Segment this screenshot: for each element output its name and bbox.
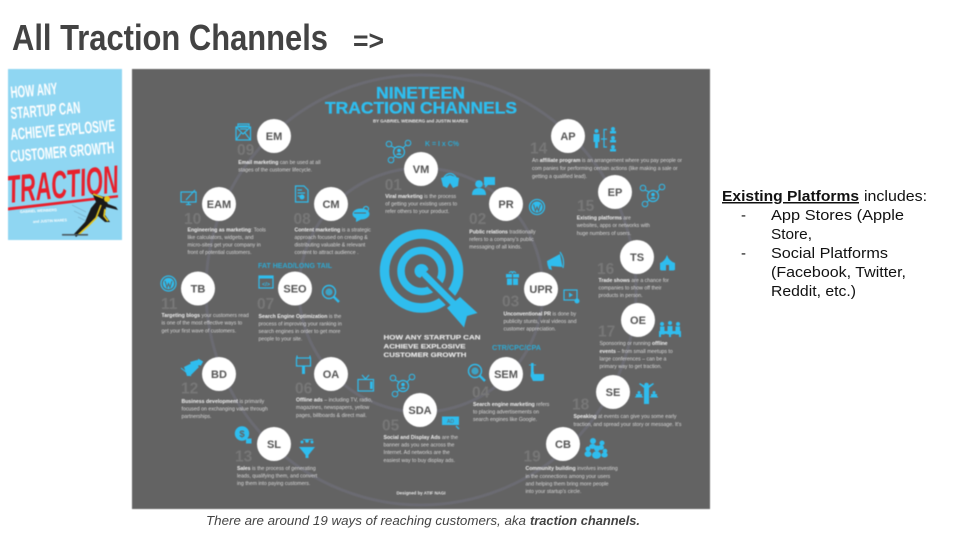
channel 04 SEM: 04 bbox=[472, 384, 490, 402]
channel 08 CM: content to attract audience . bbox=[294, 250, 359, 256]
text block: existing platforms: - bbox=[741, 245, 746, 262]
channel 03 UPR: 03 bbox=[502, 294, 520, 310]
channel 18 SE: Speaking at events can give you some early bbox=[574, 414, 677, 420]
text block: existing platforms: includes: bbox=[864, 188, 927, 205]
channel 06 OA: 06 bbox=[295, 380, 313, 398]
channel 17 OE: large conferences – can be a bbox=[600, 356, 667, 362]
icon: speaker bbox=[472, 177, 495, 195]
icon: search bbox=[322, 286, 339, 302]
book cover: Traction bbox=[7, 68, 123, 241]
channel 09 EM: stages of the customer lifecycle. bbox=[238, 168, 312, 174]
channel 03 UPR: UPR bbox=[529, 284, 553, 296]
channel 08 CM: distributing valuable & relevant bbox=[294, 242, 366, 248]
channel 19 CB: in the connections among your users bbox=[526, 474, 611, 480]
channel 03 UPR: publicity stunts, viral videos and bbox=[504, 319, 577, 325]
channel 16 TS bbox=[597, 240, 675, 299]
channel 19 CB: and helping them bring more people bbox=[526, 482, 609, 488]
icon: handshake bbox=[441, 174, 459, 188]
channel 12 BD: focused on exchanging value through bbox=[182, 406, 268, 412]
tag: fat head long tail: FAT HEAD/LONG TAIL bbox=[258, 263, 333, 270]
channel 06 OA: pages, billboards & direct mail. bbox=[296, 413, 367, 419]
channel 09 EM: Email marketing can be used at all bbox=[238, 160, 320, 166]
text block: existing platforms: Reddit, etc.) bbox=[771, 283, 856, 300]
text block: existing platforms: Store, bbox=[771, 226, 812, 243]
channel 01 VM: 01 bbox=[385, 177, 402, 194]
channel 18 SE: 18 bbox=[572, 396, 590, 414]
channel 03 UPR: Unconventional PR is done by bbox=[504, 312, 577, 318]
icon: megaphone bbox=[547, 252, 564, 270]
channel 05 SDA: easiest way to buy display ads. bbox=[384, 458, 455, 464]
channel 07 SEO: search engines in order to get more bbox=[258, 329, 341, 335]
channel 11 TB: TB bbox=[191, 284, 205, 296]
caption: There are around 19 ways of reaching customers, aka bbox=[206, 513, 526, 528]
icon: affiliate tree bbox=[594, 127, 616, 152]
center caption: CUSTOMER GROWTH bbox=[384, 352, 467, 359]
channel 11 TB: is one of the most effective ways to bbox=[162, 321, 242, 327]
icon: wordpress bbox=[530, 200, 544, 214]
channel 17 OE: OE bbox=[630, 315, 646, 327]
channel 04 SEM: search engines like Google. bbox=[473, 417, 537, 423]
channel 19 CB: 19 bbox=[524, 448, 541, 466]
channel 14 AP: AP bbox=[560, 131, 576, 143]
channel 03 UPR bbox=[502, 252, 580, 332]
channel 08 CM: approach focused on creating & bbox=[294, 235, 368, 241]
channel 18 SE bbox=[572, 375, 682, 428]
channel 13 SL: Sales is the process of generating bbox=[237, 466, 316, 472]
infographic title bbox=[325, 84, 517, 124]
channel 16 TS: Trade shows are a chance for bbox=[598, 278, 669, 284]
center caption: ACHIEVE EXPLOSIVE bbox=[384, 343, 466, 350]
channel 09 EM: EM bbox=[266, 131, 282, 143]
channel 02 PR: PR bbox=[498, 199, 514, 211]
channel 19 CB: into your startup's circle. bbox=[526, 489, 581, 495]
channel 12 BD: partnerships. bbox=[182, 414, 212, 420]
channel 06 OA bbox=[295, 356, 374, 419]
channel 02 PR: refers to a company's public bbox=[469, 237, 534, 243]
icon: ad banner: AD bbox=[447, 419, 454, 425]
channel 19 CB: Community building involves investing bbox=[526, 466, 618, 472]
channel 05 SDA: 05 bbox=[382, 418, 400, 434]
channel 07 SEO: 07 bbox=[257, 296, 274, 313]
icon: speech bubble bbox=[352, 206, 370, 222]
channel 02 PR: Public relations traditionally bbox=[469, 230, 536, 236]
icon: search bbox=[468, 364, 485, 381]
tag: ctr cpc cpa: CTR/CPC/CPA bbox=[492, 345, 541, 352]
icon: gift bbox=[506, 272, 519, 285]
channel 16 TS: TS bbox=[630, 252, 644, 264]
channel 15 EP bbox=[577, 175, 665, 237]
book cover: Traction: GABRIEL WEINBERG bbox=[20, 208, 57, 214]
channel 02 PR bbox=[469, 177, 544, 250]
channel 16 TS: 16 bbox=[597, 261, 615, 278]
text block: existing platforms: Existing Platforms bbox=[722, 188, 859, 205]
channel 10 EAM: micro-sites get your company in bbox=[188, 242, 261, 248]
channel 11 TB: 11 bbox=[161, 296, 178, 313]
channel 15 EP: Existing platforms are bbox=[577, 216, 631, 222]
channel 10 EAM: 10 bbox=[184, 211, 201, 228]
infographic title: NINETEEN bbox=[376, 84, 465, 102]
text block: existing platforms bbox=[722, 188, 927, 300]
infographic title: TRACTION CHANNELS bbox=[325, 100, 517, 118]
book cover: Traction: and JUSTIN MARES bbox=[33, 218, 67, 224]
channel 05 SDA: SDA bbox=[408, 405, 432, 417]
channel 04 SEM bbox=[468, 357, 550, 423]
channel 06 OA: magazines, newspapers, yellow bbox=[296, 405, 369, 411]
channel 08 CM: 08 bbox=[294, 211, 311, 228]
channel 11 TB: Targeting blogs your customers read bbox=[162, 313, 249, 319]
text block: existing platforms: Social Platforms bbox=[771, 245, 888, 262]
channel 04 SEM: SEM bbox=[494, 369, 518, 381]
channel 12 BD: BD bbox=[211, 369, 227, 381]
icon: network bbox=[640, 184, 665, 207]
icon: billboard bbox=[296, 356, 310, 374]
channel 14 AP bbox=[530, 119, 682, 180]
channel 12 BD: 12 bbox=[181, 380, 198, 398]
text block: existing platforms: - bbox=[741, 207, 746, 224]
channel 10 EAM: Engineering as marketing: Tools bbox=[188, 228, 266, 234]
channel 05 SDA: Social and Display Ads are the bbox=[384, 435, 458, 441]
channel 07 SEO: SEO bbox=[283, 284, 307, 296]
channel 14 AP: getting a qualified lead). bbox=[532, 174, 587, 180]
channel 18 SE: traction, and spread your story or message. It's bbox=[574, 422, 682, 428]
center caption: HOW ANY STARTUP CAN bbox=[384, 334, 481, 342]
icon: pointing hand bbox=[529, 363, 544, 381]
channel 13 SL: ing them into paying customers. bbox=[237, 481, 310, 487]
channel 07 SEO: Search Engine Optimization is the bbox=[258, 314, 341, 320]
infographic: nineteen traction channels bbox=[131, 68, 711, 510]
channel 01 VM: refer others to your product. bbox=[385, 209, 449, 215]
caption: traction channels. bbox=[530, 513, 640, 528]
icon: video bbox=[564, 290, 580, 304]
formula: K = I x C% bbox=[425, 141, 460, 148]
channel 08 CM: Content marketing is a strategic bbox=[294, 228, 371, 234]
channel 01 VM: Viral marketing is the process bbox=[385, 194, 457, 200]
credit: Designed by ATIF NAGI bbox=[396, 490, 446, 496]
channel 13 SL: 13 bbox=[235, 448, 253, 466]
icon: booth bbox=[660, 255, 675, 270]
channel 10 EAM bbox=[181, 187, 266, 256]
channel 05 SDA bbox=[382, 374, 459, 464]
icon: runner bbox=[62, 193, 118, 237]
channel 01 VM bbox=[385, 140, 459, 215]
icon: document bbox=[296, 186, 308, 202]
channel 17 OE: events – from small meetups to bbox=[600, 349, 673, 355]
channel 07 SEO: people to your site. bbox=[258, 336, 302, 342]
channel 06 OA: Offline ads – including TV, radio, bbox=[296, 398, 372, 404]
channel 15 EP: websites, apps or networks with bbox=[577, 223, 650, 229]
channel 19 CB: CB bbox=[555, 439, 571, 451]
icon: network bbox=[390, 374, 415, 397]
icon: handshake bbox=[181, 359, 203, 376]
channel 01 VM: of getting your existing users to bbox=[385, 202, 457, 208]
center caption bbox=[384, 334, 481, 359]
channel 16 TS: companies to show off their bbox=[598, 286, 662, 292]
channel 12 BD: Business development is primarily bbox=[182, 399, 265, 405]
channel 15 EP: 15 bbox=[577, 198, 595, 215]
channel 10 EAM: like calculators, widgets, and bbox=[188, 235, 254, 241]
spiral arcs bbox=[206, 75, 636, 505]
channel 18 SE: SE bbox=[606, 387, 620, 399]
channel 17 OE bbox=[598, 303, 681, 370]
icon: wordpress bbox=[161, 276, 176, 291]
icon: envelope bbox=[236, 124, 250, 140]
channel 04 SEM: to placing advertisements on bbox=[473, 410, 539, 416]
channel 05 SDA: banner ads you see across the bbox=[384, 442, 455, 448]
channel 19 CB bbox=[524, 427, 618, 495]
center target icon bbox=[384, 234, 478, 328]
channel 14 AP: 14 bbox=[530, 140, 548, 158]
channel 13 SL bbox=[235, 426, 318, 487]
channel 14 AP: An affiliate program is an arrangement where you pay people or bbox=[532, 158, 682, 164]
heading: All Traction Channels: => bbox=[353, 25, 384, 56]
channel 13 SL: SL bbox=[267, 439, 281, 451]
channel 10 EAM: EAM bbox=[207, 199, 231, 211]
channel 10 EAM: front of potential customers. bbox=[188, 250, 252, 256]
channel 02 PR: messaging of all kinds. bbox=[469, 244, 522, 250]
icon: network bbox=[386, 140, 411, 163]
channel 02 PR: 02 bbox=[469, 211, 486, 228]
channel 01 VM: VM bbox=[413, 164, 429, 176]
channel 09 EM bbox=[236, 119, 320, 174]
channel 07 SEO bbox=[257, 272, 342, 342]
icon: funnel bbox=[299, 439, 315, 458]
channel 07 SEO: process of improving your ranking in bbox=[258, 322, 342, 328]
channel 09 EM: 09 bbox=[237, 142, 255, 159]
channel 15 EP: EP bbox=[608, 187, 622, 199]
icon: dollar: $ bbox=[239, 429, 245, 440]
icon: meeting bbox=[659, 321, 681, 337]
icon: community bbox=[584, 438, 608, 459]
channel 17 OE: 17 bbox=[598, 324, 615, 340]
text block: existing platforms: (Facebook, Twitter, bbox=[771, 264, 906, 281]
channel 08 CM bbox=[294, 186, 371, 256]
channel 06 OA: OA bbox=[323, 369, 339, 381]
channel 03 UPR: customer appreciation. bbox=[504, 326, 556, 332]
channel 08 CM: CM bbox=[322, 199, 340, 211]
channel 13 SL: leads, qualifying them, and convert bbox=[237, 474, 318, 480]
channel 11 TB: get your first wave of customers. bbox=[162, 328, 236, 334]
heading: All Traction Channels: All Traction Channels bbox=[12, 17, 328, 58]
channel 15 EP: huge numbers of users. bbox=[577, 231, 631, 237]
channel 04 SEM: Search engine marketing refers bbox=[473, 402, 550, 408]
text block: existing platforms: App Stores (Apple bbox=[771, 207, 904, 224]
channel 05 SDA: Internet. Ad networks are the bbox=[384, 450, 450, 456]
icon: speaker on stage bbox=[635, 383, 658, 404]
icon: tv bbox=[358, 375, 374, 391]
channel 11 TB bbox=[161, 272, 249, 334]
channel 12 BD bbox=[181, 357, 268, 420]
channel 17 OE: primary way to get traction. bbox=[600, 364, 662, 370]
infographic title: BY GABRIEL WEINBERG and JUSTIN MARES bbox=[373, 118, 468, 124]
icon: monitor bbox=[181, 190, 196, 204]
icon: code window: </> bbox=[262, 282, 270, 288]
channel 17 OE: Sponsoring or running offline bbox=[600, 341, 668, 347]
book cover: Traction: HOW ANY bbox=[10, 80, 58, 102]
channel 16 TS: products in person. bbox=[598, 293, 643, 299]
channel 14 AP: com panies for performing certain actions (like making a sale or bbox=[532, 166, 678, 172]
